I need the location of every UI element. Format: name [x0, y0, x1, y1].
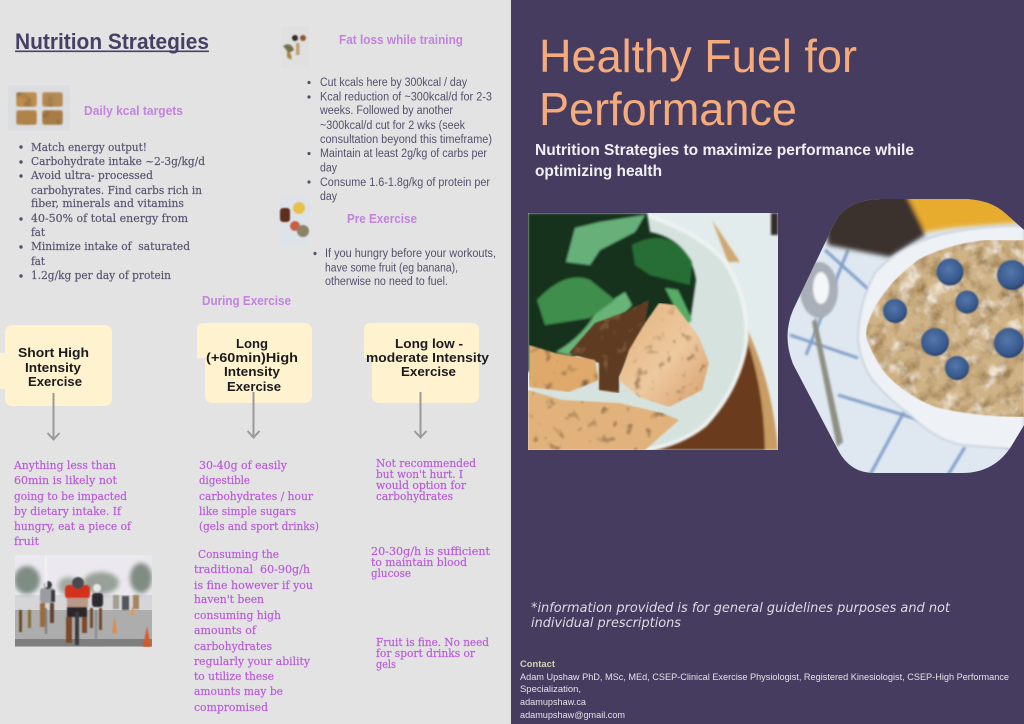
- contact block: adamupshaw@gmail.com: [520, 710, 625, 721]
- text: carbohydrates per hour: (gels and sport drinks): [199, 520, 319, 533]
- icon: pre exercise food photo: [280, 196, 309, 245]
- box: long high intensity exercise: (+60min)High: [206, 350, 298, 365]
- cloth pattern: [790, 250, 1024, 475]
- text: carbohydrates per hour: carbohydrates / hour: [199, 490, 314, 503]
- bullet list: pre exercise: [313, 248, 496, 288]
- text: traditional 60-90g/h: compromised: [194, 701, 268, 714]
- heading: Nutrition Strategies: Nutrition Strategies: [15, 29, 209, 54]
- contact block: adamupshaw.ca: [520, 697, 587, 708]
- subtitle: optimizing health: [535, 163, 662, 180]
- arrow: [414, 392, 426, 438]
- bullet list: daily kcal targets: fat: [31, 255, 46, 268]
- text: 20-30g/h: glucose: [371, 567, 411, 580]
- bullet list: daily kcal targets: Carbohydrate intake ~2-3g/kg/d: [31, 155, 205, 168]
- spoon: [800, 262, 843, 447]
- bullet list: pre exercise: otherwise no need to fuel.: [325, 276, 448, 288]
- text: fruit is fine: for sport drinks or: [376, 647, 476, 660]
- panel: pre exercise: [280, 196, 496, 288]
- text: carbohydrates per hour: [199, 459, 319, 533]
- photo: oatmeal with blueberries: [780, 192, 1024, 477]
- text: not recommended: Not recommended: [376, 457, 476, 470]
- bullet list: daily kcal targets: 1.2g/kg per day of protein: [31, 269, 171, 282]
- title: Healthy Fuel for Performance: Performance: [539, 83, 797, 135]
- text: not recommended: but won't hurt. I: [376, 468, 463, 481]
- subtitle: Nutrition Strategies to maximize performance while: [535, 142, 914, 159]
- bullet list: fat loss: day: [320, 162, 337, 174]
- box: long high intensity exercise: Long: [236, 336, 268, 351]
- column: long high intensity: [194, 323, 319, 714]
- arrow: [48, 393, 60, 440]
- text: traditional 60-90g/h: regularly your ability: [194, 655, 311, 668]
- bullet list: fat loss: Kcal reduction of ~300kcal/d for 2-3: [320, 92, 492, 104]
- bullet list: fat loss: Consume 1.6-1.8g/kg of protein per: [320, 177, 490, 189]
- arrow: [248, 392, 260, 438]
- text: traditional 60-90g/h: Consuming the: [198, 548, 279, 561]
- table and plate: [640, 213, 778, 450]
- text: carbohydrates per hour: like simple sugars: [199, 505, 296, 518]
- text: short exercise advice: 60min is likely not: [14, 474, 118, 487]
- bullet list: pre exercise: have some fruit (eg banana),: [325, 262, 458, 274]
- text: short exercise advice: fruit: [14, 535, 40, 548]
- bullet list: daily kcal targets: Avoid ultra- processed: [30, 169, 153, 182]
- left panel background: [0, 0, 511, 724]
- text: fruit is fine: [376, 636, 489, 671]
- text: traditional 60-90g/h: amounts of: [194, 624, 257, 637]
- box: long low moderate intensity exercise: moderate Intensity: [366, 350, 490, 365]
- text: fruit is fine: gels: [376, 658, 396, 671]
- box: long high intensity exercise: Intensity: [224, 364, 281, 379]
- text: 20-30g/h: to maintain blood: [371, 556, 467, 569]
- text: 20-30g/h: [371, 545, 491, 580]
- text: not recommended: carbohydrates: [376, 490, 453, 503]
- chicken pieces: [528, 300, 709, 450]
- subtitle: [535, 142, 914, 180]
- box: long low moderate intensity exercise: [364, 323, 490, 403]
- photo: chicken and broccoli bowl: [528, 213, 778, 450]
- text: traditional 60-90g/h: consuming high: [194, 609, 281, 622]
- bullet list: fat loss: [307, 77, 492, 203]
- text: carbohydrates per hour: digestible: [199, 474, 250, 487]
- bullet list: daily kcal targets: Match energy output!: [31, 141, 147, 154]
- disclaimer note: [531, 600, 951, 631]
- bullet list: fat loss: day: [320, 191, 337, 203]
- text: not recommended: would option for: [376, 479, 467, 492]
- bullet list: daily kcal targets: Minimize intake of saturated: [31, 240, 190, 253]
- text: traditional 60-90g/h: amounts may be: [194, 685, 283, 698]
- text: traditional 60-90g/h: carbohydrates: [194, 640, 272, 653]
- text: short exercise advice: going to be impacted: [14, 490, 127, 503]
- disclaimer note: individual prescriptions: [531, 615, 681, 631]
- text: short exercise advice: hungry, eat a piece of: [14, 520, 132, 533]
- oats: [866, 240, 1024, 417]
- box: long low moderate intensity exercise: Long low -: [395, 336, 463, 351]
- heading: pre exercise: Pre Exercise: [347, 211, 417, 226]
- bullet list: fat loss: consultation beyond this timeframe): [320, 134, 492, 146]
- contact block: [520, 659, 1009, 721]
- box: short high intensity exercise: Exercise: [28, 374, 82, 389]
- bullet list: fat loss: weeks. Followed by another: [319, 105, 453, 117]
- bullet list: daily kcal targets: fat: [31, 226, 46, 239]
- bowl: [858, 226, 1024, 450]
- text: carbohydrates per hour: 30-40g of easily: [199, 459, 288, 472]
- box: short high intensity exercise: Short High: [18, 345, 89, 360]
- contact block: Specialization,: [520, 684, 581, 695]
- bullet list: daily kcal targets: 40-50% of total energy from: [31, 212, 189, 225]
- icon: fat loss food photo: [281, 27, 309, 68]
- text: traditional 60-90g/h: haven't been: [194, 593, 264, 606]
- contact block: Contact: [520, 659, 556, 670]
- contact block: Adam Upshaw PhD, MSc, MEd, CSEP-Clinical Exercise Physiologist, Registered Kinesiologist, CSEP-High Performance: [520, 672, 1009, 683]
- panel: fat loss while training: [281, 27, 492, 203]
- box: short high intensity exercise: Intensity: [25, 360, 82, 375]
- dark background and juice: [824, 199, 1018, 260]
- text: traditional 60-90g/h: traditional 60-90g/h: [194, 563, 310, 576]
- title: Healthy Fuel for Performance: [539, 30, 857, 135]
- photo: cyclists racing: [14, 555, 152, 647]
- box: short high intensity exercise: [0, 325, 112, 406]
- box: long high intensity exercise: [197, 323, 312, 403]
- blueberries: [883, 258, 1024, 380]
- heading: during exercise: During Exercise: [202, 293, 291, 308]
- text: short exercise advice: by dietary intake. If: [14, 505, 122, 518]
- white bowl: [528, 213, 747, 450]
- column: long low-moderate intensity: [364, 323, 491, 671]
- title: Healthy Fuel for Performance: Healthy Fuel for: [539, 30, 857, 82]
- bullet list: fat loss: ~300kcal/d cut for 2 wks (seek: [320, 120, 465, 132]
- bullet list: daily kcal targets: [19, 141, 205, 282]
- icon: meal prep containers photo: [8, 85, 70, 131]
- box: long high intensity exercise: Exercise: [227, 379, 281, 394]
- text: traditional 60-90g/h: [194, 548, 313, 714]
- broccoli: [528, 213, 696, 372]
- text: 20-30g/h: 20-30g/h is sufficient: [371, 545, 491, 558]
- bullet list: daily kcal targets: carbohyrates. Find carbs rich in: [31, 184, 202, 197]
- column: short high intensity: [0, 325, 152, 647]
- panel: daily kcal targets: [8, 85, 205, 282]
- heading: daily kcal targets: Daily kcal targets: [84, 103, 183, 118]
- text: traditional 60-90g/h: to utilize these: [194, 670, 274, 683]
- text: traditional 60-90g/h: is fine however if you: [194, 579, 313, 592]
- disclaimer note: *information provided is for general guidelines purposes and not: [531, 600, 951, 616]
- text: short exercise advice: Anything less than: [13, 459, 116, 472]
- bullet list: daily kcal targets: fiber, minerals and vitamins: [31, 197, 184, 210]
- bullet list: fat loss: Maintain at least 2g/kg of carbs per: [320, 148, 487, 160]
- bullet list: fat loss: Cut kcals here by 300kcal / day: [320, 77, 467, 89]
- text: fruit is fine: Fruit is fine. No need: [376, 636, 489, 649]
- right panel background: [511, 0, 1024, 724]
- text: short exercise advice: [13, 459, 132, 548]
- heading: fat loss while training: Fat loss while training: [339, 32, 463, 47]
- box: long low moderate intensity exercise: Exercise: [401, 364, 456, 379]
- text: not recommended: [376, 457, 476, 503]
- bullet list: pre exercise: If you hungry before your workouts,: [325, 248, 496, 260]
